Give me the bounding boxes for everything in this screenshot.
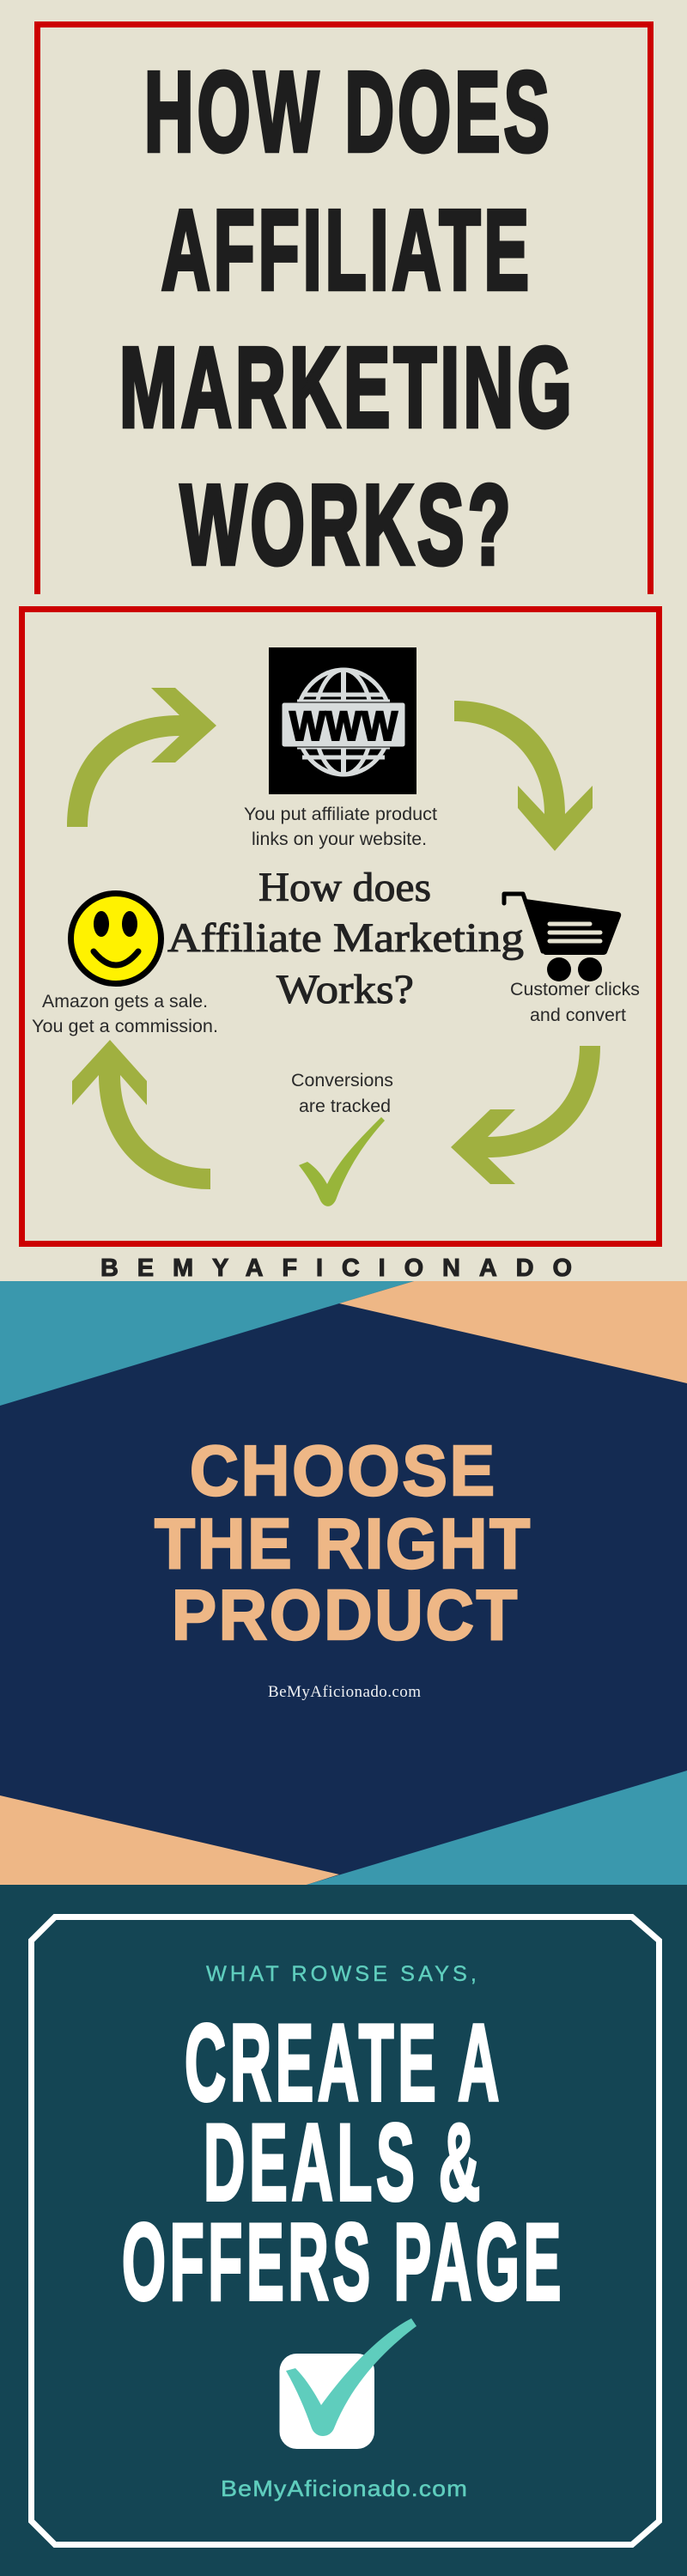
arrow: top left — [67, 688, 216, 827]
icon: www globe — [269, 647, 416, 794]
title text — [119, 48, 575, 587]
brand label: BEMYAFICIONADO — [100, 1255, 572, 1282]
icon: www globe: WWW — [289, 704, 398, 750]
step text: customer clicks — [510, 980, 640, 1025]
website caption: BeMyAficionado.com — [268, 1683, 421, 1701]
icon: shopping cart — [504, 894, 621, 981]
section heading: THE RIGHT — [155, 1504, 532, 1583]
title frame — [38, 24, 651, 594]
step text: customer clicks: Customer clicks — [510, 980, 640, 999]
arrow: top right — [454, 701, 593, 851]
step text: affiliate links: links on your website. — [252, 829, 427, 849]
section heading — [122, 2002, 565, 2323]
center heading: Affiliate Marketing — [167, 915, 524, 961]
icon: green check mark — [299, 1117, 385, 1206]
section heading — [155, 1431, 532, 1655]
panel: deals and offers — [0, 1885, 687, 2576]
octagon frame — [31, 1917, 660, 2545]
step text: conversions tracked — [291, 1071, 393, 1116]
step text: affiliate links: You put affiliate product — [244, 805, 437, 824]
section heading: CHOOSE — [190, 1431, 497, 1510]
panel: choose the right product — [0, 1281, 687, 1885]
step text: commission — [32, 992, 218, 1036]
step text: conversions tracked: are tracked — [299, 1097, 391, 1116]
step text: conversions tracked: Conversions — [291, 1071, 393, 1091]
website caption: BeMyAficionado.com — [221, 2476, 468, 2501]
icon: smiley face — [70, 893, 161, 984]
center heading — [167, 865, 524, 1012]
panel: title — [38, 24, 651, 594]
cycle frame — [22, 610, 660, 1243]
panel: affiliate cycle diagram — [22, 610, 660, 1243]
arrow: bottom left — [72, 1040, 210, 1189]
step text: customer clicks: and convert — [530, 1005, 626, 1025]
step text: commission: You get a commission. — [32, 1017, 218, 1036]
section heading: PRODUCT — [172, 1575, 520, 1655]
geometric background — [0, 1281, 687, 1885]
step text: affiliate links — [244, 805, 437, 849]
step text: commission: Amazon gets a sale. — [42, 992, 208, 1012]
arrow: bottom right — [451, 1046, 600, 1184]
kicker text: WHAT ROWSE SAYS, — [206, 1962, 480, 1986]
icon: check box — [280, 2318, 416, 2449]
center heading: How does — [258, 865, 431, 910]
center heading: Works? — [277, 967, 414, 1012]
